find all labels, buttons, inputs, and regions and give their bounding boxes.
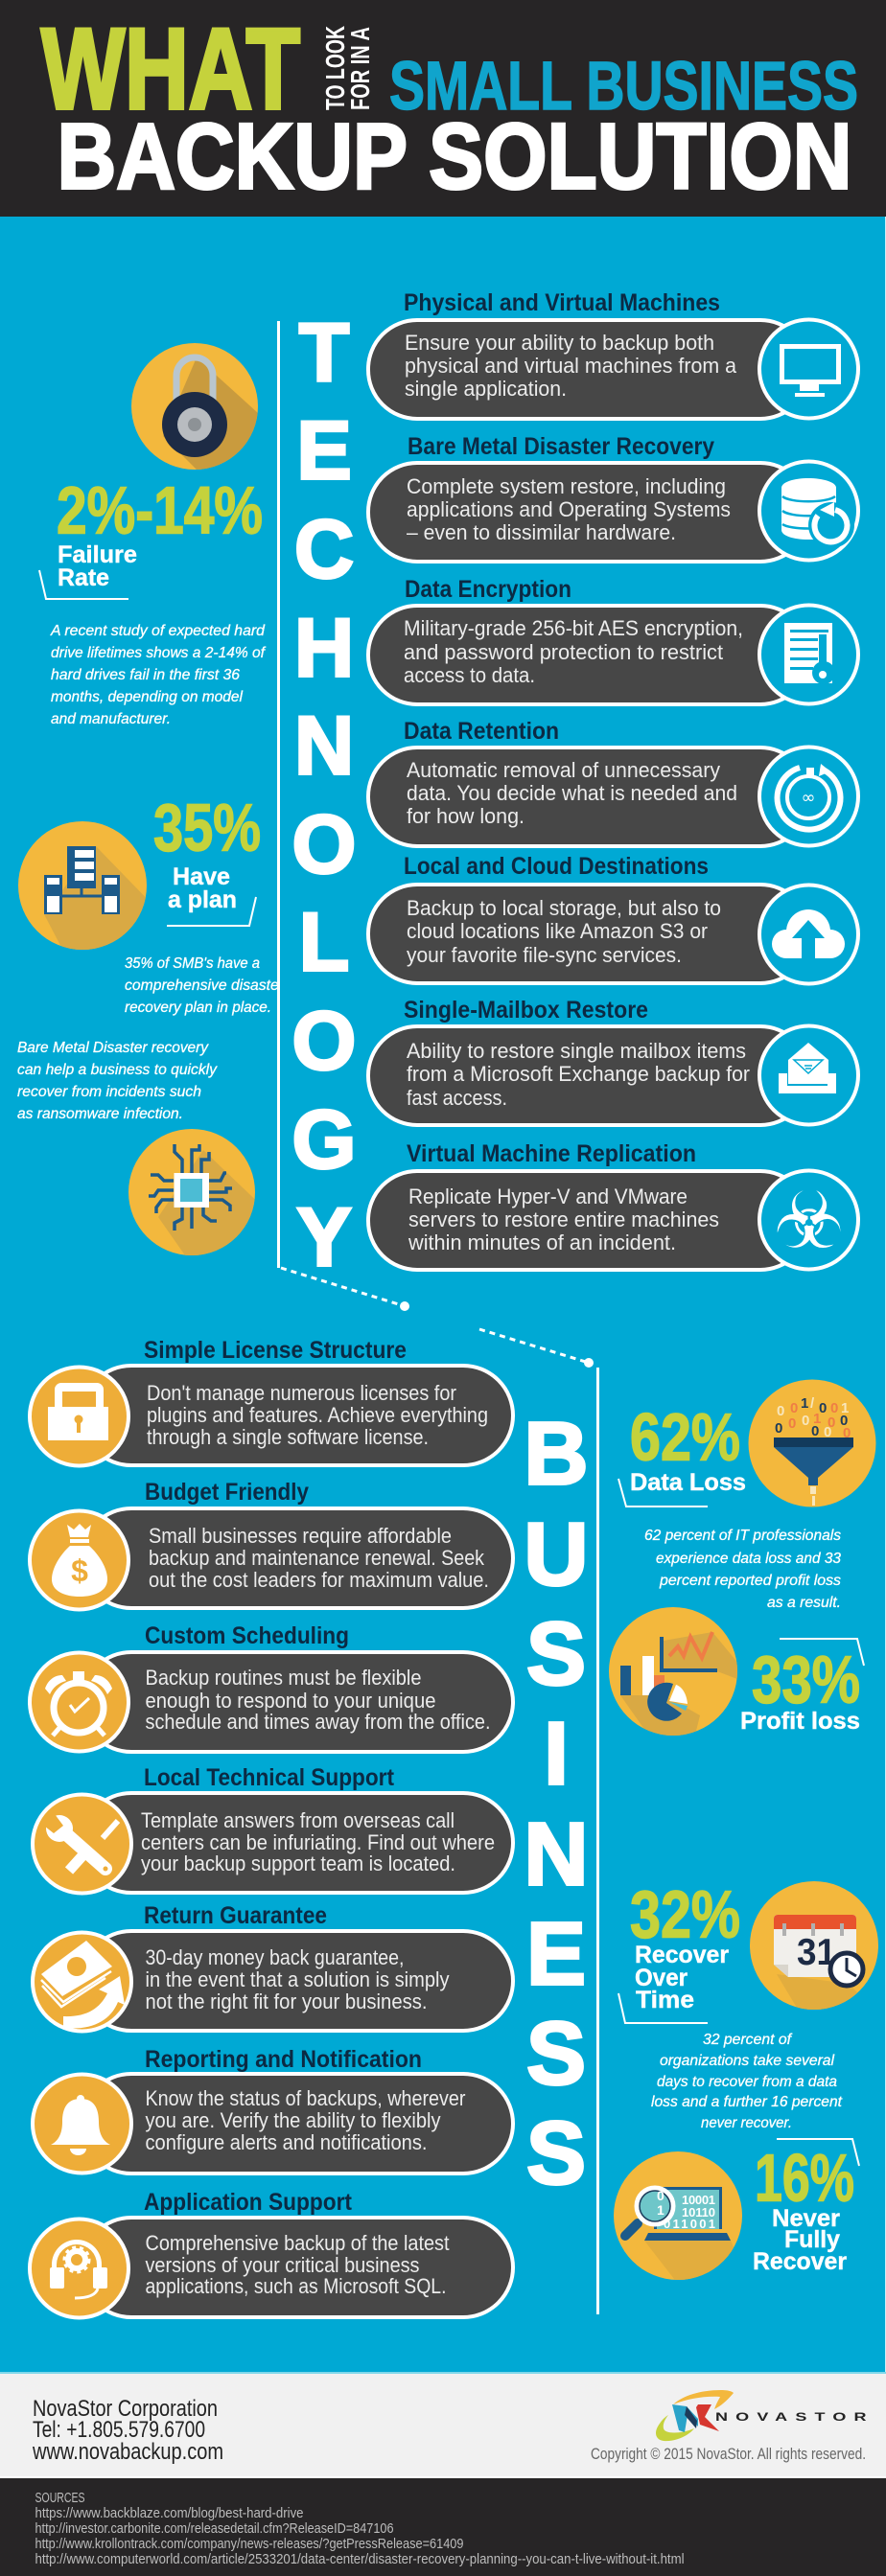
text: hard drive study: hard drives fail in the first 36	[51, 667, 240, 683]
text: bare metal note: Bare Metal Disaster recovery	[17, 1040, 209, 1056]
label: never fully recover	[753, 2139, 859, 2275]
feature: application support: Comprehensive backup of the latest	[146, 2231, 449, 2255]
connector: business dotted line	[479, 1329, 594, 1368]
text: recovery stat	[651, 2032, 843, 2131]
figure: 62%: 62%	[630, 1399, 740, 1474]
text: smb plan stat: 35% of SMB's have a	[125, 955, 260, 972]
stat: have a plan	[18, 790, 285, 1016]
figure: 33%: 33%	[752, 1643, 860, 1717]
stat: profit loss	[609, 1607, 865, 1736]
text: bare metal note: can help a business to quickly	[17, 1062, 218, 1078]
feature: simple license structure: through a single software license.	[147, 1425, 429, 1449]
technology vertical word: T	[299, 307, 349, 399]
logo: novastor	[656, 2390, 867, 2441]
feature: data retention: Automatic removal of unnecessary	[407, 758, 720, 782]
icon: database restore	[781, 478, 854, 548]
business vertical word: S	[526, 1604, 586, 1704]
sources band: http://investor.carbonite.com/releasedetail.cfm?ReleaseID=847106	[35, 2520, 393, 2537]
icon: data funnel: 1	[841, 1400, 849, 1416]
technology vertical word: C	[294, 504, 354, 596]
feature: bare metal disaster recovery	[368, 433, 858, 562]
feature: application support: applications, such as Microsoft SQL.	[146, 2274, 447, 2298]
business vertical word	[524, 1368, 599, 2314]
feature: local and cloud destinations	[368, 853, 858, 983]
text: hard drive study	[50, 623, 267, 727]
technology vertical word: Y	[296, 1192, 352, 1284]
label: never fully recover: Never	[772, 2205, 840, 2232]
feature: custom scheduling: Backup routines must be flexible	[146, 1666, 422, 1690]
label: profit loss: Profit loss	[740, 1708, 860, 1735]
feature: data retention: for how long.	[407, 804, 525, 828]
feature: single-mailbox restore: Ability to restore single mailbox items	[407, 1039, 746, 1063]
feature: physical and virtual machines: single application.	[405, 377, 567, 401]
label: profit loss	[740, 1639, 864, 1735]
icon: data funnel: /	[810, 1395, 815, 1412]
feature: simple license structure: Simple License Structure	[144, 1337, 407, 1364]
icon: data funnel: 0	[811, 1423, 819, 1439]
feature: virtual machine replication: within minutes of an incident.	[408, 1230, 676, 1254]
label: recover over time: Time	[636, 1987, 694, 2013]
feature: data retention: Data Retention	[404, 718, 559, 745]
sources band: SOURCES	[35, 2490, 84, 2506]
text: hard drive study: and manufacturer.	[51, 711, 171, 727]
icon: data funnel: 0	[828, 1414, 835, 1431]
business vertical word: S	[526, 2103, 586, 2202]
right edge highlight	[885, 217, 886, 2372]
feature: simple license structure: Don't manage numerous licenses for	[147, 1381, 456, 1405]
feature: physical and virtual machines: physical and virtual machines from a	[405, 354, 737, 378]
icon: laptop with magnifier: 0	[657, 2188, 664, 2203]
label: have a plan	[167, 863, 256, 926]
text: data loss stat: as a result.	[767, 1595, 841, 1611]
feature: bare metal disaster recovery: Bare Metal Disaster Recovery	[408, 433, 714, 460]
feature: virtual machine replication: Replicate Hyper-V and VMware	[408, 1184, 688, 1208]
feature: local technical support: Local Technical Support	[144, 1764, 395, 1791]
business vertical word: E	[526, 1903, 586, 2003]
feature: single-mailbox restore: Single-Mailbox Restore	[404, 997, 648, 1024]
contact details	[32, 2396, 223, 2465]
figure: 32%: 32%	[630, 1876, 740, 1951]
feature: bare metal disaster recovery: – even to dissimilar hardware.	[407, 520, 676, 544]
text: hard drive study: A recent study of expected hard	[50, 623, 266, 639]
connector: technology dotted line	[281, 1268, 409, 1311]
icon: data funnel: 0	[790, 1400, 798, 1416]
sources band: http://www.computerworld.com/article/2533201/data-center/disaster-recovery-planning--you-can-t-live-without-it.html	[35, 2551, 685, 2567]
icon: cloud upload	[772, 909, 845, 958]
feature: local technical support	[33, 1764, 513, 1894]
feature: budget friendly: Small businesses require affordable	[149, 1524, 452, 1548]
feature: local technical support: Template answers from overseas call	[141, 1808, 455, 1832]
sources band: https://www.backblaze.com/blog/best-hard-drive	[35, 2505, 303, 2521]
business vertical word: S	[526, 2003, 586, 2103]
text: recovery stat: days to recover from a data	[657, 2074, 837, 2090]
technology vertical word: E	[296, 404, 352, 496]
icon: bell	[51, 2095, 110, 2155]
text: data loss stat: percent reported profit loss	[659, 1573, 841, 1589]
stat: recover over time	[618, 1876, 886, 2131]
icon: laptop with magnifier: 011001	[664, 2217, 715, 2231]
icon: data funnel: 0	[830, 1400, 838, 1416]
technology vertical word: G	[292, 1094, 356, 1186]
feature: data retention: data. You decide what is needed and	[407, 781, 737, 805]
icon: retention dial: ∞	[802, 788, 815, 808]
feature: custom scheduling: schedule and times away from the office.	[146, 1710, 491, 1734]
feature: simple license structure: plugins and features. Achieve everything	[147, 1403, 488, 1427]
text: smb plan stat: comprehensive disaster	[125, 978, 285, 994]
text: smb plan stat: recovery plan in place.	[125, 1000, 271, 1016]
text: data loss stat	[644, 1528, 841, 1611]
label: recover over time: Over	[635, 1965, 688, 1991]
feature: simple license structure	[30, 1337, 513, 1466]
icon: biohazard: ☣	[774, 1176, 844, 1267]
contact details: www.novabackup.com	[32, 2439, 223, 2465]
technology vertical word: O	[292, 995, 356, 1087]
feature: local and cloud destinations: cloud locations like Amazon S3 or	[407, 919, 708, 943]
label: have a plan: a plan	[168, 886, 237, 913]
feature: reporting and notification: Know the status of backups, wherever	[146, 2086, 466, 2110]
label: recover over time	[618, 1942, 729, 2023]
feature: return guarantee	[33, 1902, 513, 2032]
feature: reporting and notification: you are. Verify the ability to flexibly	[146, 2108, 441, 2132]
business vertical word: B	[524, 1403, 589, 1503]
icon: money bag	[52, 1524, 107, 1597]
feature: physical and virtual machines	[368, 289, 858, 419]
feature: data encryption: Data Encryption	[405, 576, 571, 603]
title word: WHAT: WHAT	[41, 5, 300, 133]
technology vertical word: H	[294, 602, 354, 694]
feature: single-mailbox restore: fast access.	[407, 1086, 507, 1110]
feature: virtual machine replication: Virtual Machine Replication	[407, 1140, 696, 1167]
feature: return guarantee: not the right fit for your business.	[146, 1990, 428, 2013]
text: recovery stat: organizations take several	[660, 2053, 834, 2069]
icon: data funnel: 0	[775, 1420, 782, 1437]
technology vertical word: N	[294, 700, 354, 792]
feature: budget friendly: backup and maintenance renewal. Seek	[149, 1546, 485, 1570]
icon: combination lock	[131, 343, 258, 470]
feature: reporting and notification	[33, 2046, 513, 2174]
feature: single-mailbox restore	[368, 997, 858, 1125]
logo: novastor: NOVASTOR	[715, 2411, 867, 2424]
stat: never fully recover	[614, 2138, 860, 2280]
text: recovery stat: never recover.	[701, 2115, 792, 2131]
label: never fully recover: Recover	[753, 2248, 847, 2275]
icon: retention dial	[778, 764, 841, 830]
figure: 2%-14%: 2%-14%	[57, 473, 263, 548]
feature: local and cloud destinations: Local and Cloud Destinations	[404, 853, 709, 880]
feature: application support: Application Support	[144, 2189, 353, 2216]
feature: physical and virtual machines: Physical and Virtual Machines	[404, 289, 720, 316]
feature: application support: versions of your critical business	[146, 2253, 420, 2277]
feature: data encryption: Military-grade 256-bit AES encryption,	[404, 616, 743, 640]
text: bare metal note: recover from incidents such	[17, 1084, 201, 1100]
icon: laptop with magnifier	[614, 2151, 742, 2280]
text: smb plan stat	[125, 955, 285, 1016]
feature: custom scheduling	[30, 1622, 513, 1752]
label: data loss: Data Loss	[630, 1469, 746, 1496]
icon: money stack with return arrow	[41, 1941, 125, 2029]
icon: padlock	[48, 1383, 108, 1440]
business vertical word: I	[544, 1704, 569, 1804]
technology vertical word: O	[292, 799, 356, 891]
label: recover over time: Recover	[635, 1942, 729, 1968]
feature: budget friendly: out the cost leaders for maximum value.	[149, 1568, 489, 1592]
text: data loss stat: 62 percent of IT professionals	[644, 1528, 841, 1544]
feature: custom scheduling: Custom Scheduling	[145, 1622, 349, 1649]
text: recovery stat: loss and a further 16 percent	[651, 2094, 843, 2110]
label: failure rate	[39, 541, 137, 599]
icon: wrench and screwdriver	[40, 1810, 118, 1871]
text: hard drive study: months, depending on model	[51, 689, 243, 705]
feature: return guarantee: Return Guarantee	[144, 1902, 327, 1929]
label: failure rate: Rate	[58, 564, 109, 591]
footer contact band	[0, 2372, 886, 2476]
text: data loss stat: experience data loss and 33	[656, 1551, 841, 1567]
icon: data funnel: 0	[840, 1413, 848, 1429]
text: hard drive study: drive lifetimes shows a 2-14% of	[51, 645, 267, 661]
feature: budget friendly	[30, 1479, 513, 1610]
icon: data funnel	[748, 1380, 876, 1506]
feature: data encryption: access to data.	[404, 663, 535, 687]
icon: laptop with magnifier: 10001	[682, 2193, 715, 2207]
sources band	[0, 2476, 886, 2576]
icon: data funnel: 0	[843, 1425, 851, 1441]
contact details: Tel: +1.805.579.6700	[33, 2417, 205, 2443]
title rotated: to look for in a	[320, 26, 375, 110]
feature: bare metal disaster recovery: applications and Operating Systems	[407, 497, 731, 521]
icon: support headset with gear	[50, 2240, 107, 2298]
icon: data funnel: 0	[824, 1424, 831, 1440]
figure: 16%: 16%	[755, 2141, 854, 2216]
label: never fully recover: Fully	[784, 2226, 840, 2253]
icon: calendar and clock	[750, 1881, 878, 2010]
icon: charts	[609, 1607, 737, 1736]
feature: reporting and notification: Reporting and Notification	[145, 2046, 422, 2073]
feature: application support	[30, 2189, 513, 2317]
business vertical word: U	[524, 1505, 589, 1604]
feature: budget friendly: Budget Friendly	[145, 1479, 309, 1506]
feature: data retention	[368, 718, 858, 846]
icon: circuit chip	[128, 1129, 255, 1255]
text: recovery stat: 32 percent of	[703, 2032, 793, 2048]
icon: monitor	[782, 347, 838, 397]
feature: data encryption: and password protection to restrict	[404, 640, 723, 664]
icon: data funnel: 1	[813, 1411, 821, 1427]
icon: data funnel: 0	[788, 1415, 796, 1432]
icon: calendar and clock: 31	[797, 1932, 836, 1973]
stat: data loss	[618, 1380, 876, 1611]
feature: physical and virtual machines: Ensure your ability to backup both	[405, 331, 714, 355]
contact details: NovaStor Corporation	[33, 2396, 218, 2422]
feature: custom scheduling: enough to respond to your unique	[146, 1689, 435, 1713]
feature: local technical support: your backup support team is located.	[141, 1852, 455, 1875]
feature: single-mailbox restore: from a Microsoft Exchange backup for	[407, 1062, 750, 1086]
text: bare metal note	[17, 1040, 218, 1122]
icon: laptop with magnifier: 1	[657, 2202, 664, 2218]
icon: alarm clock	[45, 1671, 112, 1736]
stat: failure rate	[39, 343, 278, 727]
feature: virtual machine replication: servers to restore entire machines	[408, 1208, 719, 1231]
technology vertical word	[277, 307, 356, 1284]
feature: reporting and notification: configure alerts and notifications.	[146, 2130, 428, 2154]
icon: data funnel: 0	[802, 1413, 809, 1429]
icon: data funnel: 0	[819, 1400, 827, 1416]
feature: local technical support: centers can be infuriating. Find out where	[141, 1830, 495, 1854]
icon: laptop with magnifier: 10110	[682, 2205, 715, 2220]
icon: data funnel: 0	[777, 1403, 784, 1419]
icon: money bag: $	[71, 1553, 88, 1588]
feature: local and cloud destinations: Backup to local storage, but also to	[407, 896, 721, 920]
icon: server network	[18, 821, 147, 950]
text: bare metal note: as ransomware infection.	[17, 1106, 183, 1122]
icon: encrypted document	[784, 623, 835, 684]
feature: bare metal disaster recovery: Complete system restore, including	[407, 474, 726, 498]
feature: return guarantee: 30-day money back guarantee,	[146, 1945, 405, 1969]
feature: return guarantee: in the event that a solution is simply	[146, 1967, 449, 1991]
feature: local and cloud destinations: your favorite file-sync services.	[407, 943, 682, 967]
feature: data encryption	[368, 576, 858, 704]
icon: data funnel: 1	[801, 1395, 808, 1412]
technology vertical word: L	[299, 897, 349, 989]
sources band: http://www.krollontrack.com/company/news-releases/?getPressRelease=61409	[35, 2536, 463, 2552]
header banner	[0, 0, 886, 217]
icon: inbox with envelope	[779, 1043, 836, 1093]
feature: virtual machine replication	[368, 1140, 858, 1270]
figure: 35%: 35%	[153, 790, 261, 864]
label: failure rate: Failure	[58, 541, 137, 568]
label: data loss	[618, 1469, 746, 1506]
business vertical word: N	[524, 1804, 589, 1903]
label: have a plan: Have	[173, 863, 230, 890]
